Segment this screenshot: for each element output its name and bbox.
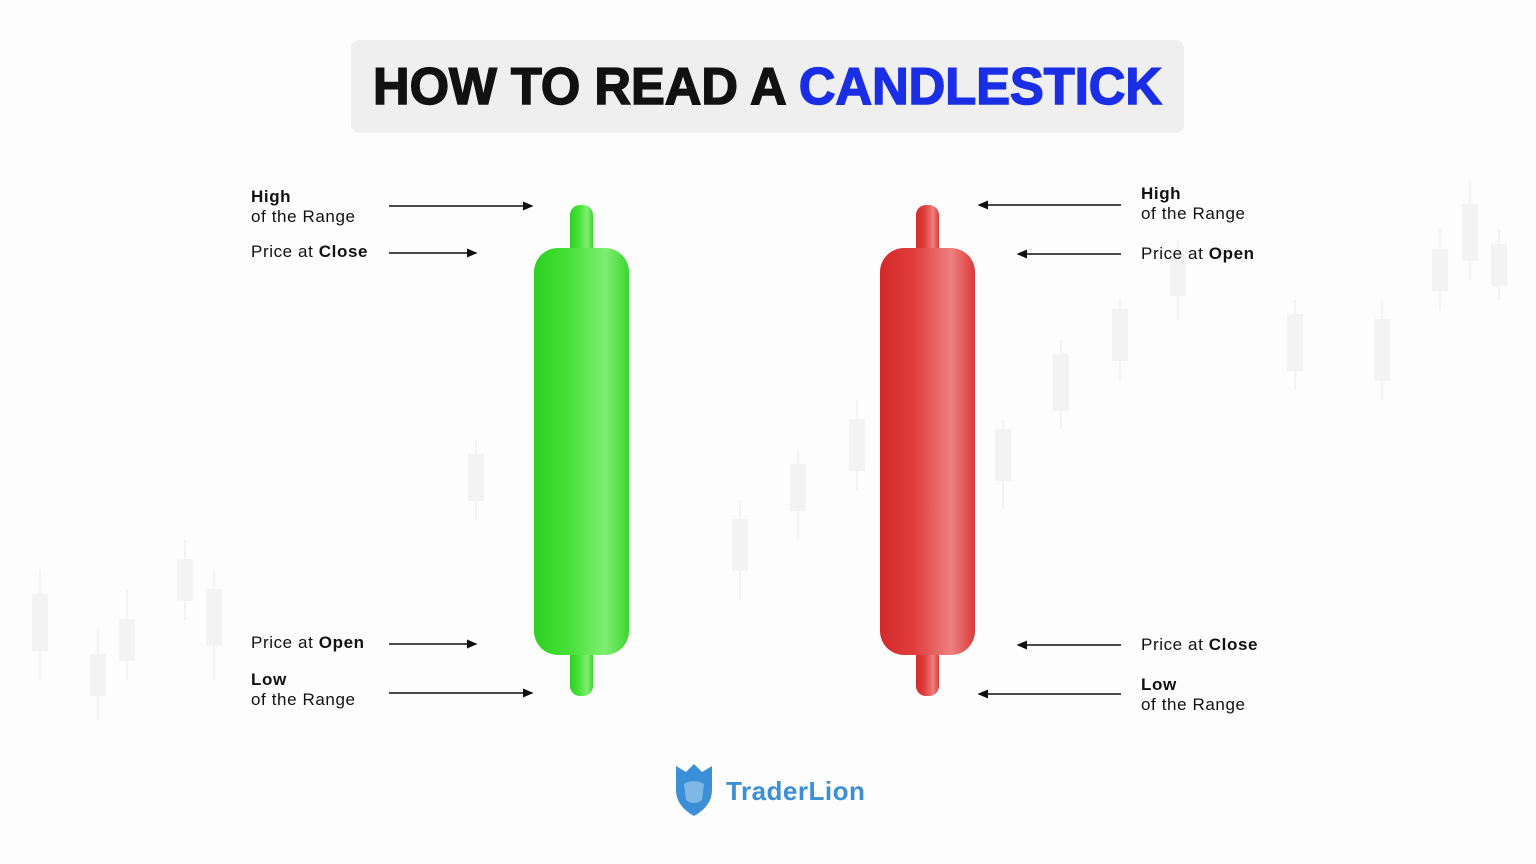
green candle — [534, 205, 629, 696]
label: red open: Price at Open — [1141, 244, 1255, 263]
label: red low — [1141, 675, 1246, 714]
logo — [676, 764, 865, 816]
label: red high: High — [1141, 184, 1181, 203]
label: green low: of the Range — [251, 690, 356, 709]
label: green low: Low — [251, 670, 287, 689]
label: red high — [1141, 184, 1246, 223]
title — [351, 40, 1184, 133]
label: red high: of the Range — [1141, 204, 1246, 223]
label: green low — [251, 670, 356, 709]
label: red close: Price at Close — [1141, 635, 1258, 654]
label: red low: of the Range — [1141, 695, 1246, 714]
label: green open: Price at Open — [251, 633, 365, 652]
label: green high: of the Range — [251, 207, 356, 226]
label: green high: High — [251, 187, 291, 206]
icon: lion — [676, 764, 712, 816]
red candle — [880, 205, 975, 696]
label: green close: Price at Close — [251, 242, 368, 261]
label: red low: Low — [1141, 675, 1177, 694]
title: HOW TO READ A CANDLESTICK — [373, 58, 1162, 116]
logo text: TraderLion — [726, 776, 865, 806]
label: green high — [251, 187, 356, 226]
